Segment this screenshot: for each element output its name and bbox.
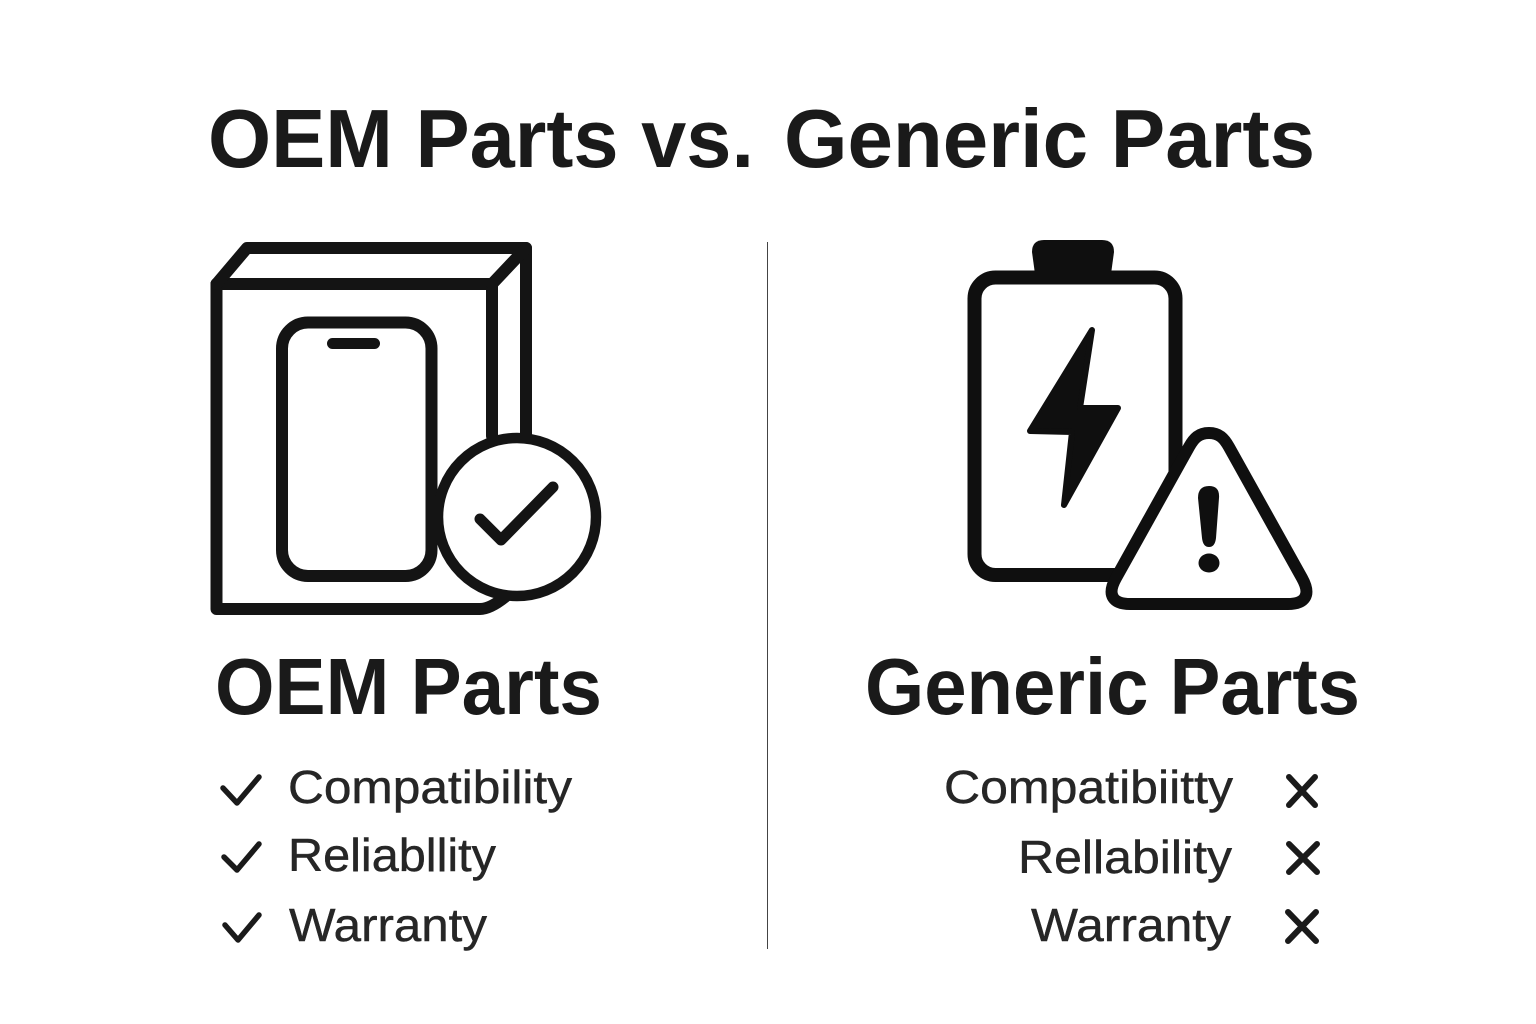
list: generic drawbacks bbox=[944, 761, 1317, 951]
title bbox=[208, 92, 1315, 185]
panel: Generic parts bbox=[865, 240, 1360, 951]
item: Reliability bbox=[1018, 831, 1317, 883]
item: Compatibility: Compatibiitty bbox=[944, 761, 1233, 813]
heading: OEM Parts: OEM Parts bbox=[215, 642, 602, 731]
icon: battery with warning triangle bbox=[974, 240, 1306, 604]
title: Generic Parts bbox=[784, 92, 1315, 185]
heading: Generic Parts: Generic Parts bbox=[865, 642, 1360, 731]
center divider bbox=[766, 242, 768, 949]
item: Warranty bbox=[1031, 899, 1316, 951]
item: Reliability: Rellability bbox=[1018, 831, 1232, 883]
list: OEM benefits bbox=[223, 761, 572, 951]
item: Warranty: Warranty bbox=[289, 899, 487, 951]
item: Compatibility: Compatibility bbox=[288, 761, 572, 813]
icon: phone box with check badge bbox=[216, 248, 596, 609]
panel: OEM parts bbox=[215, 248, 602, 951]
item: Warranty: Warranty bbox=[1031, 899, 1231, 951]
item: Reliability: Reliabllity bbox=[288, 829, 496, 881]
title: OEM Parts vs. bbox=[208, 92, 754, 185]
